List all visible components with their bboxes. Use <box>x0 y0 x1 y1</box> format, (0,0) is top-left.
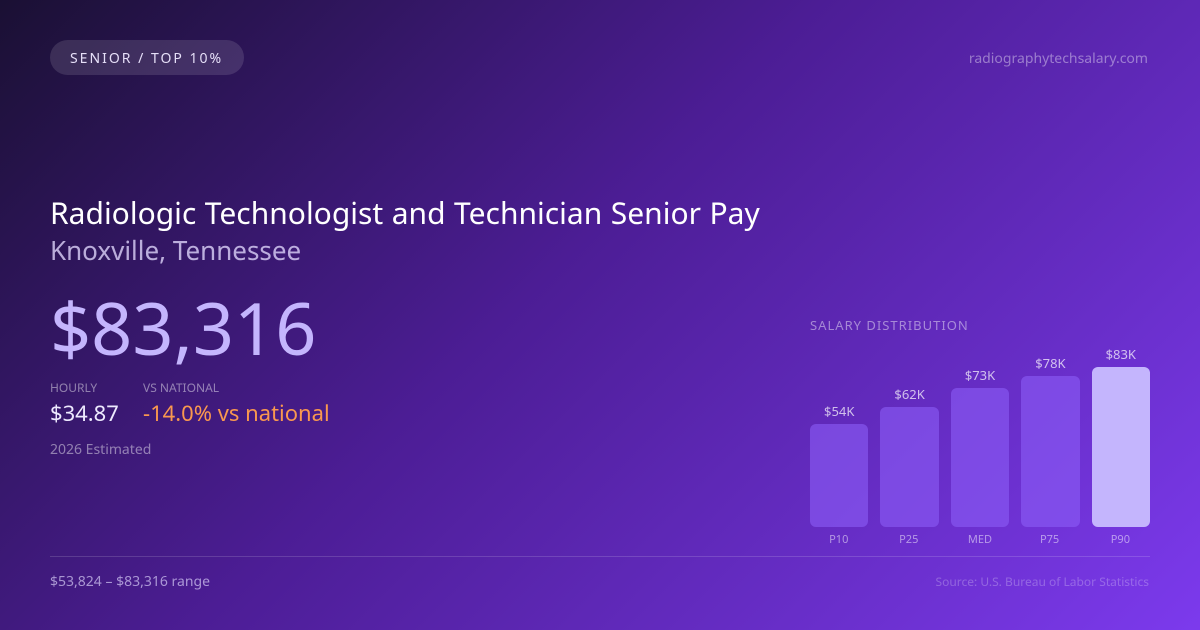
value $54K: $54K <box>824 402 854 420</box>
value $73K: $73K <box>965 366 995 384</box>
label P25: P25 <box>899 532 918 547</box>
badge: senior / top 10%: SENIOR / TOP 10% <box>70 49 223 68</box>
title: Radiologic Technologist and Technician Senior Pay <box>50 192 760 233</box>
value $62K: $62K <box>894 385 925 403</box>
bar P25 <box>880 407 939 527</box>
source: Source: U.S. Bureau of Labor Statistics <box>936 573 1149 590</box>
stat: hourly <box>50 379 119 428</box>
bar P90 highlighted <box>1092 367 1150 527</box>
stat: vs national <box>143 379 330 428</box>
bar MED <box>951 388 1009 527</box>
hourly label: HOURLY <box>50 379 97 396</box>
value $83K: $83K <box>1106 345 1136 363</box>
estimate year note: 2026 Estimated <box>50 440 151 459</box>
bar P10 <box>810 424 868 527</box>
chart heading: SALARY DISTRIBUTION <box>810 316 969 334</box>
label MED: MED <box>968 532 992 547</box>
badge: senior / top 10% <box>50 40 244 75</box>
vs national label: VS NATIONAL <box>143 379 219 396</box>
location subtitle: Knoxville, Tennessee <box>50 232 301 268</box>
site domain: radiographytechsalary.com <box>969 49 1148 68</box>
main salary figure: $83,316 <box>50 279 316 377</box>
label P75: P75 <box>1040 532 1059 547</box>
value $78K: $78K <box>1035 354 1066 372</box>
hourly value: $34.87 <box>50 398 119 428</box>
label P90: P90 <box>1111 532 1130 547</box>
salary range: $53,824 – $83,316 range <box>50 572 210 591</box>
vs national value: -14.0% vs national <box>143 398 330 428</box>
bar P75 <box>1021 376 1080 527</box>
label P10: P10 <box>829 532 848 547</box>
